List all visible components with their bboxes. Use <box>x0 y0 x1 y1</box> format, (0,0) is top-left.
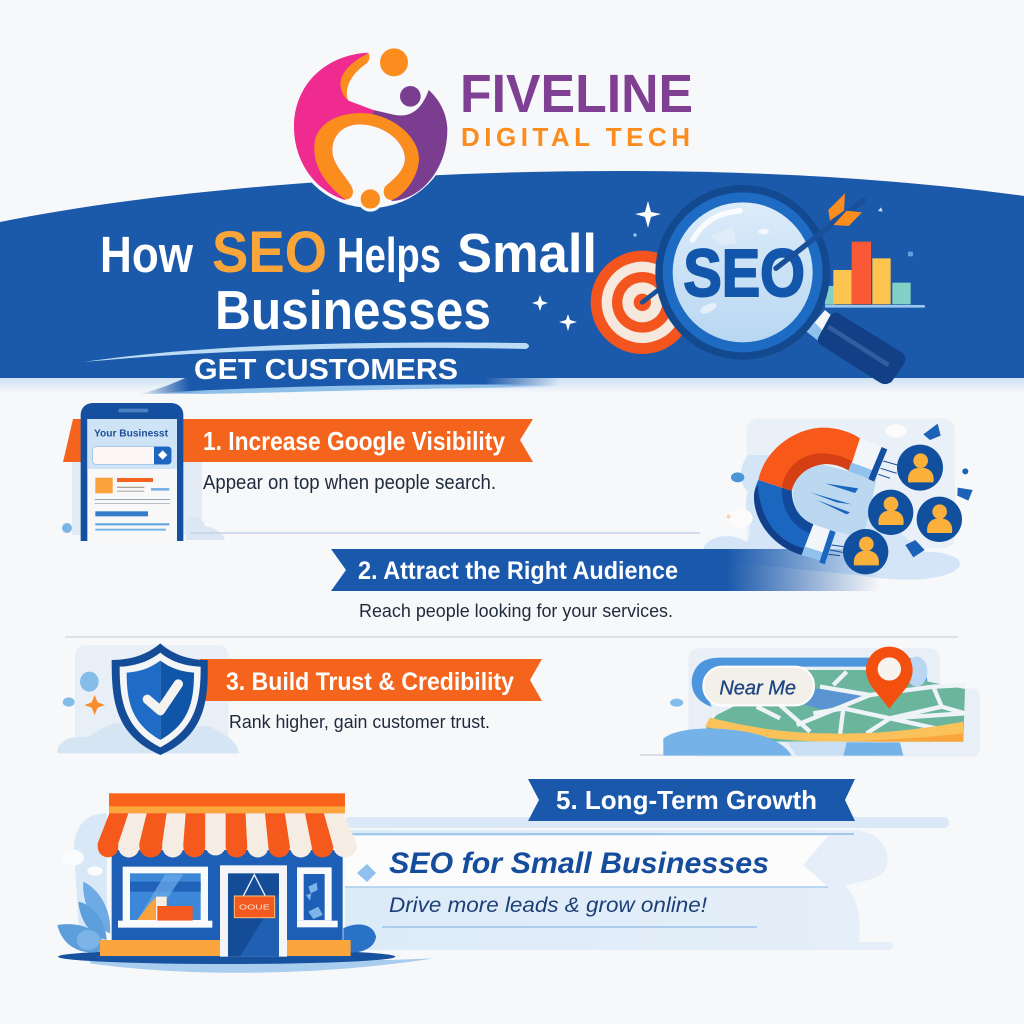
section 3 <box>57 643 980 757</box>
blue ribbon 5 <box>528 779 855 821</box>
icon: phone: Your Businesst <box>94 428 169 439</box>
customers <box>843 445 962 574</box>
store backdrop <box>74 813 107 947</box>
white banner <box>345 836 828 887</box>
sparkles <box>532 201 661 331</box>
logo: DIGITAL TECH <box>461 122 690 152</box>
handle <box>807 310 905 384</box>
section 1 <box>62 403 700 541</box>
right window <box>297 867 338 927</box>
logo wordmark: FIVELINE <box>460 64 693 124</box>
title: Small <box>457 222 597 284</box>
SEO magnifier illustration <box>591 185 925 384</box>
text 2: Reach people looking for your services. <box>359 601 673 621</box>
title: SEO <box>212 220 327 285</box>
lens <box>655 185 830 360</box>
bubble <box>703 667 814 705</box>
arrow <box>776 193 863 268</box>
subtitle: GET CUSTOMERS <box>194 354 458 386</box>
bubble: Near Me <box>719 677 796 699</box>
phone panel backdrop <box>62 462 225 540</box>
heading 1: 1. Increase Google Visibility <box>203 426 505 456</box>
bar chart <box>825 242 925 308</box>
title: Businesses <box>215 279 491 341</box>
orange ribbon 3 <box>200 659 542 701</box>
target <box>591 251 694 354</box>
closing panel <box>345 817 949 950</box>
logo <box>289 45 693 212</box>
icon: map near me <box>640 647 980 757</box>
title: How <box>100 226 193 283</box>
orange ribbon 1 <box>63 419 533 462</box>
magnet backdrop <box>703 418 960 580</box>
closing text: Drive more leads & grow online! <box>389 894 707 917</box>
awning <box>98 793 357 858</box>
heading 5: 5. Long-Term Growth <box>556 785 817 815</box>
lens: SEO <box>683 237 805 311</box>
shield backdrop <box>57 645 239 753</box>
logo mark <box>289 45 452 212</box>
map pin <box>866 647 913 709</box>
section 5 <box>57 779 949 973</box>
section 2 <box>331 418 973 621</box>
icon: magnet attracting customers <box>727 424 973 574</box>
door <box>220 865 287 957</box>
banner <box>0 171 1024 394</box>
diamond <box>357 864 376 882</box>
blue ribbon 2 <box>331 549 880 591</box>
icon: storefront <box>57 793 433 973</box>
confetti <box>905 424 973 557</box>
heading 2: 2. Attract the Right Audience <box>358 557 678 585</box>
icon: phone <box>81 403 183 541</box>
plants <box>57 882 376 953</box>
text 1: Appear on top when people search. <box>203 472 496 494</box>
heading 3: 3. Build Trust & Credibility <box>226 668 514 696</box>
title: Helps <box>337 229 441 283</box>
ground shadow <box>90 958 433 973</box>
left window <box>118 867 212 928</box>
title <box>100 220 597 341</box>
icon: shield <box>112 643 208 755</box>
text 3: Rank higher, gain customer trust. <box>229 712 490 732</box>
door: OOUE <box>239 902 270 911</box>
building <box>112 850 343 957</box>
magnet body <box>754 428 897 564</box>
closing heading: SEO for Small Businesses <box>389 847 769 880</box>
